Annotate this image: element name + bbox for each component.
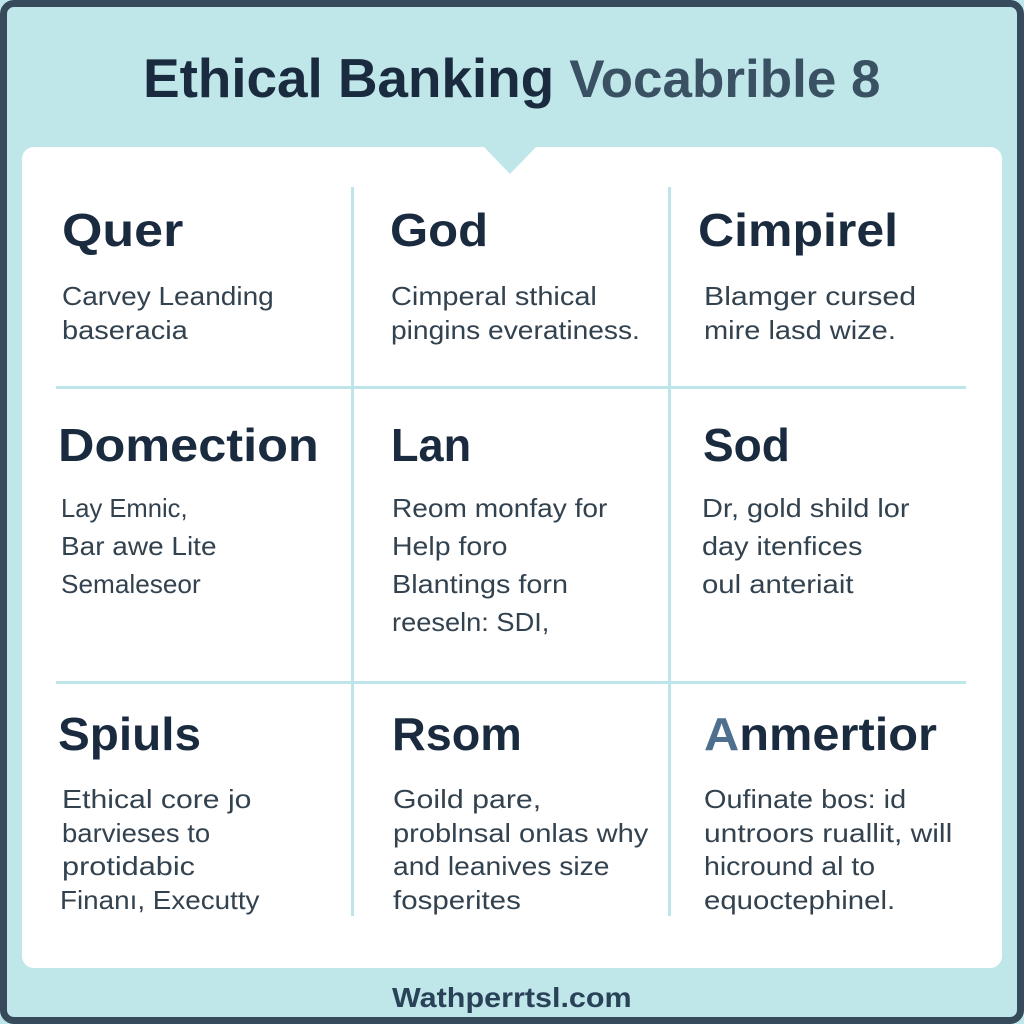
text: Lan description: Help foro	[392, 531, 508, 561]
card pointer	[483, 146, 537, 174]
text: Rsom description	[393, 784, 648, 914]
text: Quer description: Carvey Leanding	[62, 281, 274, 311]
text: Domection description: Semaleseor	[61, 569, 201, 599]
text: Quer description: baseracia	[62, 314, 188, 344]
heading: Spiuls: Spiuls	[58, 708, 201, 760]
text: Spiuls description: Finanı, Executty	[60, 884, 259, 914]
panel: main card	[22, 147, 1002, 968]
text: Cimpirel description	[704, 281, 916, 344]
text: Cimpirel description: Blamger cursed	[704, 281, 916, 311]
grid: vertical divider 2	[668, 187, 671, 916]
heading: Anmertior: Anmertior	[704, 708, 937, 760]
footer website: Wathperrtsl.com	[392, 982, 632, 1013]
text: Rsom description: fosperites	[393, 884, 521, 914]
text: God description	[391, 281, 640, 344]
heading: Quer: Quer	[62, 204, 183, 256]
heading: Rsom: Rsom	[392, 708, 522, 760]
text: Sod description	[702, 493, 910, 599]
text: Lan description: reeseln: SDI,	[392, 607, 549, 637]
text: Spiuls description: barvieses to	[62, 818, 210, 848]
grid: horizontal divider 2	[56, 681, 966, 684]
text: Rsom description: and leanives size	[393, 851, 609, 881]
text: Anmertior description: equoctephinel.	[704, 884, 895, 914]
text: Anmertior description	[704, 784, 952, 914]
text: Sod description: oul anteriait	[702, 569, 853, 599]
text: Lan description: Blantings forn	[392, 569, 568, 599]
text: Spiuls description: protidabic	[62, 851, 195, 881]
text: Rsom description: problnsal onlas why	[393, 818, 648, 848]
text: Cimpirel description: mire lasd wize.	[704, 314, 896, 344]
text: Domection description: Bar awe Lite	[61, 531, 217, 561]
heading: Lan: Lan	[391, 419, 471, 471]
text: Quer description	[62, 281, 274, 344]
text: Domection description: Lay Emnic,	[61, 493, 188, 523]
heading: Sod: Sod	[703, 419, 790, 471]
heading: Cimpirel: Cimpirel	[698, 204, 898, 256]
text: Lan description: Reom monfay for	[392, 493, 607, 523]
text: God description: pingins everatiness.	[391, 314, 640, 344]
grid: horizontal divider 1	[56, 386, 966, 389]
text: Anmertior description: Oufinate bos: id	[704, 784, 906, 814]
text: God description: Cimperal sthical	[391, 281, 597, 311]
heading: Domection: Domection	[58, 419, 319, 471]
text: Anmertior description: hicround al to	[704, 851, 875, 881]
text: Rsom description: Goild pare,	[393, 784, 541, 814]
text: Spiuls description: Ethical core jo	[62, 784, 251, 814]
text: Sod description: day itenfices	[702, 531, 862, 561]
text: Lan description	[392, 493, 607, 637]
text: Sod description: Dr, gold shild lor	[702, 493, 909, 523]
text: Domection description	[61, 493, 217, 599]
grid: vertical divider 1	[351, 187, 354, 916]
heading: God: God	[390, 204, 488, 256]
text: Anmertior description: untroors ruallit, will	[704, 818, 952, 848]
text: Spiuls description	[60, 784, 260, 914]
title: Ethical Banking Vocabrible 8	[143, 47, 881, 109]
